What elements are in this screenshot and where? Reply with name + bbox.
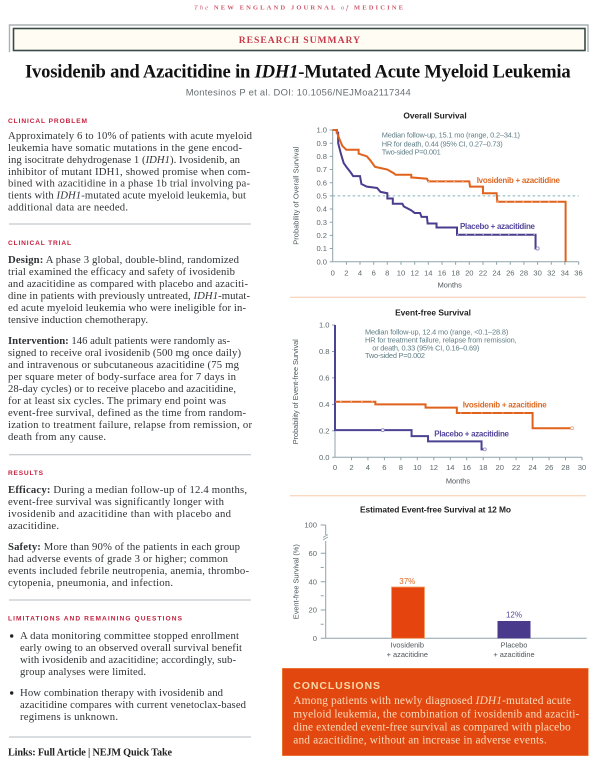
y tick labels: 1.0 [316, 126, 327, 135]
axes [330, 130, 579, 265]
bullet: venetoclax comparison [10, 687, 247, 723]
intervention paragraph: per square meter of body-surface area for 7 days in [8, 371, 237, 383]
y tick labels: 0.3 [316, 218, 327, 227]
efficacy paragraph: Efficacy: During a median follow-up of 12.4 months, [8, 484, 247, 496]
label: placebo: Placebo [501, 641, 527, 650]
x tick labels [331, 268, 583, 278]
chart: event-free survival [291, 307, 586, 486]
y tick labels: 60 [309, 549, 317, 558]
x axis title: Months [438, 280, 462, 290]
x tick labels: 12 [430, 463, 438, 472]
statistics note: HR for treatment failure, relapse from remission, [365, 336, 517, 345]
design paragraph: ed acute myeloid leukemia who were ineligible for in- [8, 302, 246, 314]
bullet: data monitoring: A data monitoring committee stopped enrollment [20, 630, 239, 642]
statistics note: Two-sided P=0.002 [365, 351, 425, 360]
x tick labels: 30 [578, 463, 586, 472]
y tick labels: 0.2 [316, 231, 327, 240]
x tick labels: 6 [372, 268, 376, 278]
x tick labels: 10 [413, 463, 422, 472]
y tick labels: 0.8 [319, 347, 330, 356]
chart: overall survival: Overall Survival [403, 111, 467, 121]
section: clinical problem: inhibitor of mutant IDH1, showed promise when com- [8, 166, 250, 178]
censor marks [428, 181, 565, 250]
section: clinical trial: CLINICAL TRIAL [8, 240, 71, 247]
x tick labels: 20 [465, 268, 474, 278]
section: clinical problem [8, 118, 253, 214]
label: ivosidenib: + azacitidine [387, 650, 428, 659]
x tick labels: 22 [479, 268, 487, 278]
statistics note: or death, 0.33 (95% CI, 0.16–0.69) [372, 343, 479, 352]
y tick labels: 40 [309, 577, 317, 586]
x tick labels: 16 [462, 463, 471, 472]
efficacy paragraph: event-free survival was significantly longer with [8, 496, 225, 508]
median line [333, 195, 579, 197]
section: clinical problem: bined with azacitidine in a phase 1b trial involving pa- [8, 178, 250, 190]
design paragraph: and azacitidine as compared with placebo and azaciti- [8, 278, 248, 290]
x tick labels [333, 463, 586, 472]
section: results [8, 470, 249, 589]
x axis title: Months [446, 476, 470, 486]
statistics note [365, 327, 517, 360]
design paragraph: trial examined the efficacy and safety of ivosidenib [8, 266, 235, 278]
x tick labels: 28 [520, 268, 528, 278]
intervention paragraph: 28-day cycles) or to receive placebo and azacitidine, [8, 383, 236, 395]
chart: estimated event-free survival at 12 months: Estimated Event-free Survival at 12 Mo [360, 505, 511, 515]
y tick labels: 0 [313, 634, 317, 643]
safety paragraph: cytopenia, pneumonia, and infection. [8, 577, 173, 589]
efficacy paragraph: azacitidine. [8, 520, 59, 532]
design paragraph: Design: A phase 3 global, double-blind, randomized [8, 254, 240, 266]
label: placebo curve: Placebo + azacitidine [434, 430, 510, 438]
y tick labels: 100 [304, 521, 317, 530]
label: placebo curve: Placebo + azacitidine [460, 222, 536, 231]
citation: Montesinos P et al. DOI: 10.1056/NEJMoa2117344 [186, 86, 411, 98]
bullet: venetoclax comparison: How combination therapy with ivosidenib and [20, 687, 224, 699]
statistics note: Two-sided P=0.001 [382, 148, 441, 157]
x tick labels: 18 [451, 268, 460, 278]
axes [321, 525, 587, 638]
y tick labels: 1.0 [319, 321, 330, 330]
section: limitations and remaining questions [8, 615, 247, 723]
y tick labels [316, 126, 327, 266]
intervention paragraph: Intervention: 146 adult patients were randomly as- [8, 335, 230, 347]
bar: ivosidenib: 37% [399, 577, 415, 586]
bullet: venetoclax comparison: azacitidine compares with current venetoclax-based [20, 699, 247, 711]
x tick labels: 36 [574, 268, 583, 278]
curves [333, 130, 566, 262]
intervention paragraph [8, 335, 252, 443]
y axis title: Event-free Survival (%) [292, 544, 300, 619]
x tick labels: 34 [561, 268, 569, 278]
bullet: venetoclax comparison: regimens is unknown. [20, 711, 118, 723]
x tick labels: 8 [399, 463, 403, 472]
section: clinical problem: additional data are needed. [8, 202, 128, 214]
x tick labels: 30 [533, 268, 542, 278]
intervention paragraph: and intravenous or subcutaneous azacitidine (75 mg [8, 359, 240, 371]
x tick labels: 0 [333, 463, 337, 472]
section: clinical trial [8, 240, 252, 443]
x tick labels: 26 [545, 463, 553, 472]
design paragraph: tensive induction chemotherapy. [8, 314, 148, 326]
y tick labels: 20 [309, 606, 317, 615]
censor marks [340, 402, 574, 451]
y tick labels: 0.4 [316, 205, 327, 214]
axis break [323, 534, 328, 540]
x tick labels: 24 [492, 268, 501, 278]
x tick labels: 2 [344, 268, 349, 278]
intervention paragraph: event-free survival, defined as the time from random- [8, 407, 246, 419]
label: ivosidenib curve: Ivosidenib + azacitidine [463, 400, 547, 410]
section: limitations and remaining questions: LIMITATIONS AND REMAINING QUESTIONS [8, 615, 183, 622]
intervention paragraph: signed to receive oral ivosidenib (500 mg once daily) [8, 347, 241, 359]
curves [335, 325, 572, 449]
x tick labels: 2 [349, 463, 354, 472]
y tick labels: 0.1 [316, 244, 327, 253]
banner: research summary [10, 25, 588, 52]
x tick labels: 4 [366, 463, 370, 472]
efficacy paragraph: ivosidenib and azacitidine than with placebo and [8, 508, 232, 520]
x tick labels: 10 [397, 268, 405, 278]
x tick labels: 22 [512, 463, 520, 472]
y tick labels: 0.4 [319, 400, 330, 409]
bullet: data monitoring: early owing to an observed overall survival benefit [20, 642, 242, 654]
y tick labels: 0.2 [319, 426, 330, 436]
label: ivosidenib [387, 641, 428, 659]
x tick labels: 0 [331, 268, 335, 278]
y tick labels: 0.0 [319, 453, 330, 462]
x tick labels: 18 [479, 463, 487, 472]
bar: ivosidenib [392, 577, 424, 638]
safety paragraph: had adverse events of grade 3 or higher; common [8, 553, 229, 565]
y tick labels [304, 521, 317, 643]
journal name: The NEW ENGLAND JOURNAL of MEDICINE [194, 4, 404, 12]
conclusion text: myeloid leukemia, the combination of ivosidenib and azaciti- [293, 708, 580, 720]
intervention paragraph: ization to treatment failure, relapse from remission, or [8, 419, 252, 431]
y tick labels: 0.6 [316, 178, 327, 187]
left column [8, 118, 253, 758]
x tick labels: 14 [446, 463, 455, 472]
conclusion text [293, 695, 580, 747]
section: results: RESULTS [8, 470, 44, 477]
title: Ivosidenib and Azacitidine in IDH1-Mutated Acute Myeloid Leukemia [25, 62, 571, 83]
statistics note [382, 131, 520, 157]
banner: research summary: RESEARCH SUMMARY [239, 35, 360, 46]
x tick labels: 4 [358, 268, 362, 278]
bullet: data monitoring: with ivosidenib and azacitidine; accordingly, sub- [20, 654, 236, 666]
chart: event-free survival: Event-free Survival [395, 307, 471, 317]
y tick labels [319, 321, 330, 462]
bullet: data monitoring: group analyses were limited. [20, 666, 146, 678]
y tick labels: 0.6 [319, 374, 330, 383]
section: clinical problem: leukemia have somatic mutations in the gene encod- [8, 142, 242, 154]
heading: CONCLUSIONS [293, 680, 380, 692]
label: placebo: + azacitidine [493, 650, 535, 659]
x tick labels: 26 [506, 268, 515, 278]
axes [332, 325, 582, 460]
section: clinical problem: CLINICAL PROBLEM [8, 118, 88, 125]
x tick labels: 14 [424, 268, 433, 278]
safety paragraph [8, 541, 249, 589]
y tick labels: 0.0 [316, 257, 327, 266]
x tick labels: 32 [547, 268, 556, 278]
x tick labels: 6 [382, 463, 387, 472]
bar: placebo [498, 611, 530, 638]
y axis title: Probability of Event-free Survival [291, 339, 300, 444]
bullet: data monitoring [10, 630, 242, 678]
chart: estimated event-free survival at 12 months [292, 505, 587, 659]
design paragraph: dine in patients with previously untreated, IDH1-mutat- [8, 290, 250, 302]
section: clinical problem: Approximately 6 to 10% of patients with acute myeloid [8, 130, 253, 142]
label: placebo [493, 641, 535, 659]
x tick labels: 20 [495, 463, 504, 472]
statistics note: Median follow-up, 15.1 mo (range, 0.2–34.1) [382, 131, 520, 140]
efficacy paragraph [8, 484, 247, 532]
y tick labels: 0.5 [316, 192, 327, 201]
y axis title: Probability of Overall Survival [292, 146, 300, 245]
statistics note: Median follow-up, 12.4 mo (range, <0.1–28.8) [365, 327, 508, 336]
x tick labels: 16 [438, 268, 446, 278]
y tick labels: 0.9 [316, 139, 327, 148]
safety paragraph: Safety: More than 90% of the patients in each group [8, 541, 240, 553]
safety paragraph: events included febrile neutropenia, anemia, thrombo- [8, 565, 249, 577]
label: ivosidenib curve: Ivosidenib + azacitidine [477, 176, 561, 185]
conclusion text: dine extended event-free survival as compared with placebo [293, 722, 571, 734]
x tick labels: 28 [561, 463, 570, 472]
panel: conclusions [282, 668, 588, 756]
x tick labels: 24 [528, 463, 537, 472]
x tick labels: 12 [410, 268, 419, 278]
bar: placebo: 12% [506, 611, 522, 620]
conclusion text: and azacitidine, without an increase in adverse events. [293, 735, 547, 747]
intervention paragraph: for at least six cycles. The primary end point was [8, 395, 226, 407]
chart: overall survival [292, 111, 583, 290]
y tick labels: 0.8 [316, 152, 327, 161]
y tick labels: 0.7 [316, 165, 327, 174]
x tick labels: 8 [385, 268, 389, 278]
conclusion text: Among patients with newly diagnosed IDH1-mutated acute [293, 695, 571, 707]
section: clinical problem: tients with IDH1-mutated acute myeloid leukemia, but [8, 190, 246, 202]
design paragraph [8, 254, 250, 326]
intervention paragraph: death from any cause. [8, 431, 106, 443]
label: ivosidenib: Ivosidenib [391, 641, 424, 650]
section: clinical problem: ing isocitrate dehydrogenase 1 (IDH1). Ivosidenib, an [8, 154, 241, 166]
statistics note: HR for death, 0.44 (95% CI, 0.27–0.73) [382, 139, 503, 148]
links: Links: Full Article | NEJM Quick Take [8, 748, 172, 758]
